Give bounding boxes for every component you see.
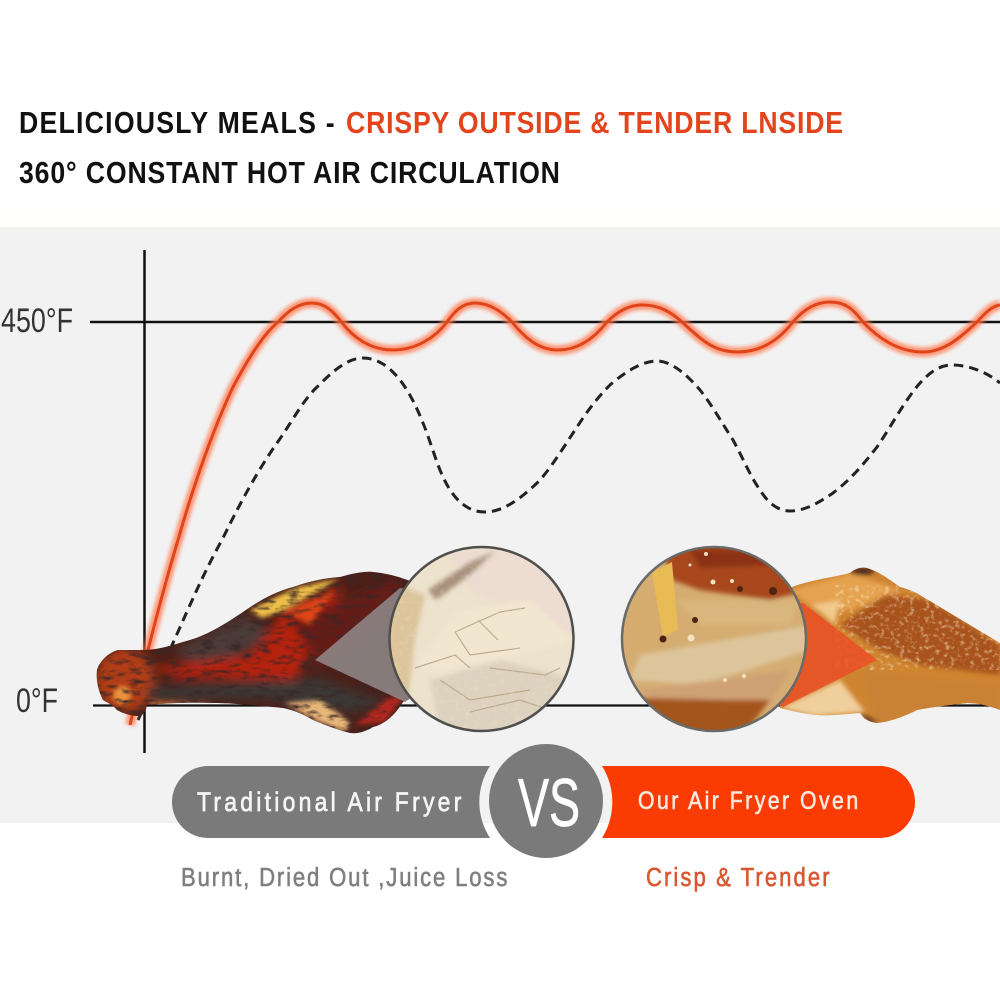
heading line 1 orange: CRISPY OUTSIDE & TENDER LNSIDE xyxy=(346,106,843,141)
caption burnt dried out: Burnt, Dried Out ,Juice Loss xyxy=(181,863,507,892)
label traditional: Traditional Air Fryer xyxy=(197,787,461,817)
bone end xyxy=(113,686,131,704)
temperature chart xyxy=(1,250,1000,753)
toothpick xyxy=(652,562,678,637)
lower skin xyxy=(874,703,1000,723)
versus comparison bar xyxy=(172,744,915,858)
0F baseline xyxy=(93,704,1000,707)
dark red upper xyxy=(290,578,400,670)
pale under skin xyxy=(780,680,865,716)
burnt drumstick illustration xyxy=(96,572,410,734)
heading line 2: 360° CONSTANT HOT AIR CIRCULATION xyxy=(19,156,560,191)
red magnifier cone xyxy=(770,603,877,707)
brown skin edge xyxy=(428,551,495,600)
knob xyxy=(95,648,155,712)
lens ring xyxy=(390,547,574,731)
grey magnifier cone on burnt drumstick xyxy=(315,588,420,702)
red mid band xyxy=(150,585,345,680)
pale juicy bands xyxy=(630,625,810,685)
VS text: VS xyxy=(518,765,580,841)
title xyxy=(19,106,843,191)
dark peak xyxy=(849,567,875,575)
knob shadow xyxy=(860,712,880,724)
tan left edge xyxy=(390,586,426,695)
crust bottom xyxy=(644,696,770,730)
crisp speckled upper xyxy=(840,595,1000,675)
dashed curve traditional air fryer xyxy=(138,358,1000,720)
label 0F: 0°F xyxy=(16,682,58,720)
upper skin xyxy=(790,573,900,610)
VS circle xyxy=(489,744,603,858)
yellow skin highlight xyxy=(250,578,340,618)
lower grey-beige xyxy=(431,660,564,730)
label our oven: Our Air Fryer Oven xyxy=(638,786,858,814)
heading line 1 black: DELICIOUSLY MEALS - xyxy=(19,106,335,141)
pink upper right xyxy=(460,554,491,578)
orange curve our air fryer oven xyxy=(130,302,1000,725)
pale lower skin xyxy=(285,700,350,732)
grey pill traditional xyxy=(172,766,490,838)
crust top xyxy=(630,548,805,730)
lower dark grey band xyxy=(145,678,390,712)
y axis xyxy=(143,250,146,753)
orange pill our oven xyxy=(602,766,915,838)
meat cracks xyxy=(415,608,560,712)
roasted drumstick illustration xyxy=(780,568,1000,723)
magnified dry meat circle xyxy=(385,545,580,735)
juice highlights xyxy=(688,552,746,682)
magnified juicy meat circle xyxy=(620,540,810,740)
label 450F: 450°F xyxy=(1,302,73,340)
pale centre xyxy=(514,602,554,624)
lens ring xyxy=(622,547,806,731)
charred specks xyxy=(660,586,777,642)
450F reference line xyxy=(90,321,1000,323)
dark upper shaft xyxy=(175,615,275,672)
chart background panel xyxy=(0,210,1000,823)
pale wedge xyxy=(812,600,840,625)
caption crisp and tender: Crisp & Trender xyxy=(646,863,830,892)
